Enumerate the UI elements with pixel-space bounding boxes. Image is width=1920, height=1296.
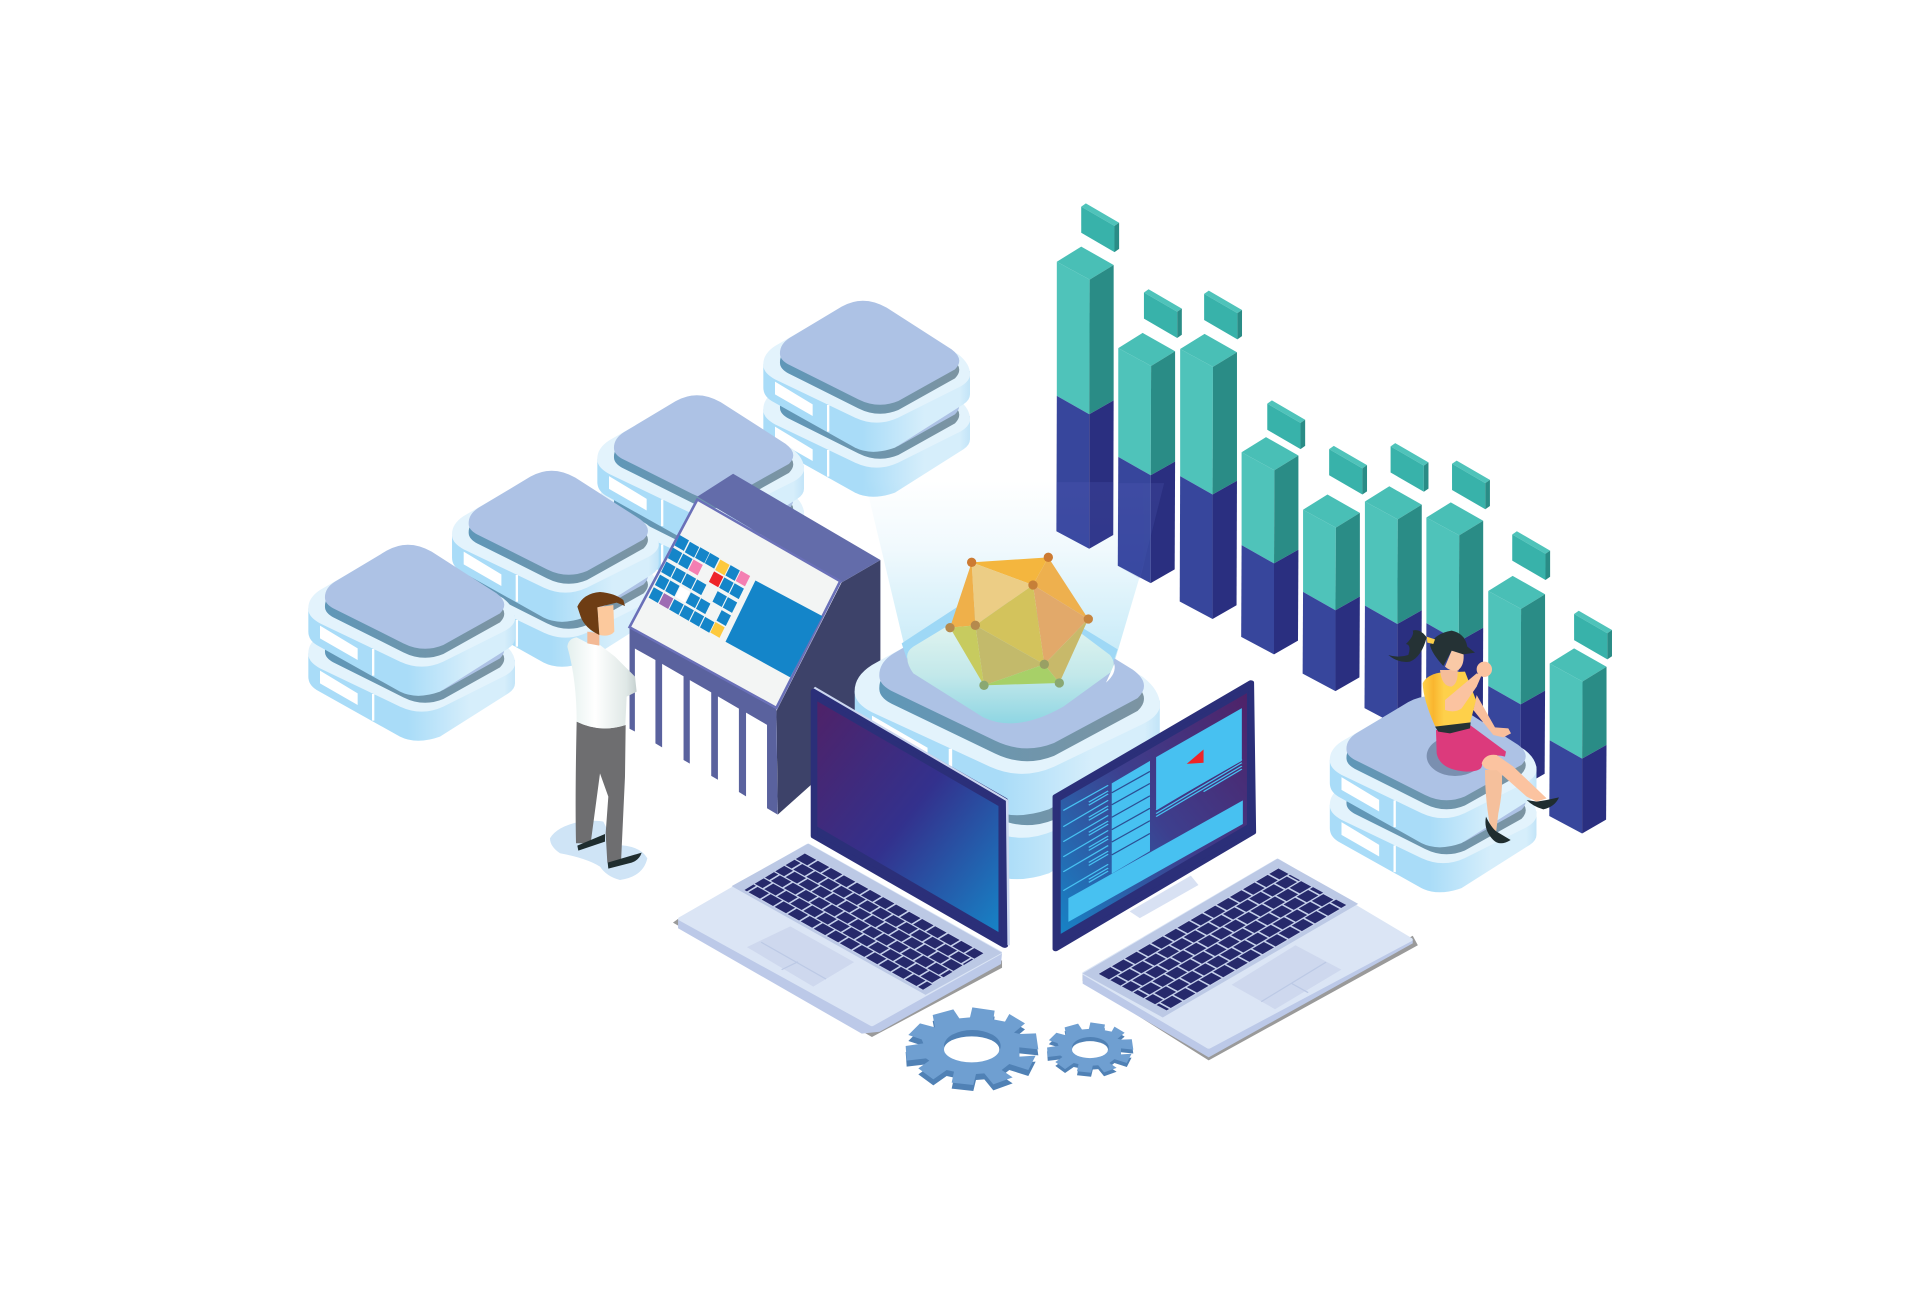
polyhedron nodes [945,553,1093,690]
right laptop with monitor [1056,683,1418,1060]
crossed leg [1482,755,1547,802]
bar 5 [1303,495,1360,691]
skirt [1436,725,1506,772]
screen display [817,701,998,932]
bar 6 [1364,486,1422,726]
seat shadow [1427,736,1483,776]
shirt [1423,672,1476,728]
small gear [1047,1022,1133,1077]
kiosk side [776,560,880,815]
bar chart [1056,203,1612,833]
video panel [1156,708,1242,810]
monitor stand [1130,876,1198,918]
laptop base shadow [673,919,1002,1037]
menu separators and text lines [1063,759,1242,891]
server stack 1 [308,545,515,741]
server stack 2 [452,471,659,667]
bar 7 [1426,502,1483,753]
bottom panel [1068,800,1243,922]
central server stack [855,601,1160,879]
beam-tinted plate edge [902,607,1118,667]
neck [1440,670,1458,687]
bar 2 [1118,333,1175,583]
hinge strip [1083,859,1358,1017]
shoes [577,834,642,869]
server stack 4 [763,301,970,497]
face [1445,651,1464,671]
bar 4 [1241,437,1298,654]
belt [1435,722,1471,733]
keyboard [1098,868,1347,1011]
coloured key grid [649,535,750,638]
near arm [1445,673,1482,711]
polyhedron [950,557,1088,685]
kiosk top [697,474,880,582]
lower leg [1485,770,1502,833]
neck [587,632,599,646]
hair [577,592,625,635]
hair [1430,631,1475,666]
screen frame [814,691,1005,945]
beam tint on bars [1056,482,1164,579]
laptop base side [678,919,1002,1034]
kiosk front frame [630,627,778,815]
kiosk terminal [630,474,880,815]
keyboard [743,853,984,990]
server stack under girl [1330,696,1537,892]
hair tie [1427,637,1435,644]
bar 1 [1056,247,1114,549]
bar 3 [1180,334,1237,619]
kiosk screen [630,499,840,708]
person standing at kiosk [550,592,647,880]
large gear [906,1007,1038,1091]
monitor screen [1061,693,1247,934]
deck [1085,861,1410,1047]
server stack 3 [597,395,804,591]
hand [1477,662,1492,677]
floating caps [1081,203,1612,659]
laptop deck [681,845,999,1024]
central hologram and pad [902,553,1118,723]
glowing pad [907,618,1114,723]
hinge strip [732,844,1002,995]
projection beam [865,481,1168,677]
shirt [567,637,637,728]
floor shadow [550,821,647,880]
kiosk front panels [630,627,778,815]
base side [1083,940,1413,1057]
base shadow [1083,936,1418,1060]
trousers [576,722,626,863]
bar 9 [1549,648,1607,833]
trackpad [747,926,854,987]
pad notch [1106,664,1115,683]
seated girl [1388,630,1559,843]
left laptop [673,687,1009,1037]
monitor frame [1056,683,1253,949]
shoes [1485,797,1559,843]
far arm [1473,695,1511,737]
face [597,605,614,636]
ponytail [1388,630,1427,662]
blue display area [726,581,822,677]
bar 8 [1488,576,1545,788]
trackpad [1232,945,1341,1009]
menu column [1112,761,1150,874]
screen edge highlight [814,687,1009,945]
play triangle [1187,750,1204,764]
